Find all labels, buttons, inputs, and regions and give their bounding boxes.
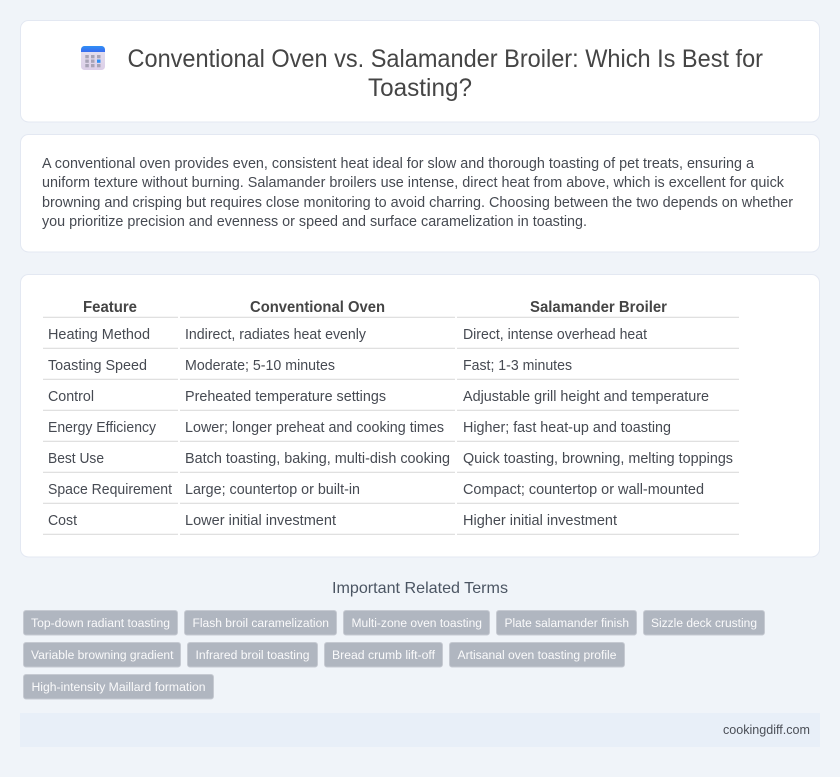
tag (644, 610, 764, 635)
heading: important related terms: Important Related Terms (332, 580, 508, 597)
table row: control: Adjustable grill height and temperature (463, 389, 709, 405)
table header row: Salamander Broiler (530, 299, 667, 316)
panel: introduction text: uniform texture without burning. Salamander broilers use intense, direct heat from above, which is excellent for quick (42, 175, 785, 191)
table row: space requirement: Space Requirement (48, 482, 172, 498)
icon: calendar (81, 46, 105, 70)
table row: cost: Cost (48, 513, 77, 529)
panel: comparison table (20, 274, 820, 557)
table row: best use (48, 451, 733, 467)
tag (324, 642, 442, 667)
table row: space requirement: Compact; countertop or wall-mounted (463, 482, 704, 498)
panel: introduction text (20, 134, 820, 252)
table row: heating method: Heating Method (48, 327, 150, 343)
table row: space requirement (48, 482, 704, 498)
tag: Multi-zone oven toasting (352, 616, 482, 630)
tag (496, 610, 636, 635)
footer (20, 713, 820, 747)
title (128, 45, 763, 102)
tag (184, 610, 336, 635)
title: Toasting? (368, 74, 472, 102)
panel: introduction text: you prioritize precision and evenness or speed and surface caramelization in toasting. (42, 214, 587, 230)
table row: cost (48, 513, 617, 529)
tag: Top-down radiant toasting (31, 616, 170, 630)
table row: energy efficiency: Lower; longer preheat and cooking times (185, 420, 444, 436)
table row: energy efficiency (48, 420, 671, 436)
table row: best use: Batch toasting, baking, multi-dish cooking (185, 451, 450, 467)
tag (344, 610, 490, 635)
panel: title header (20, 20, 820, 122)
tag: Plate salamander finish (504, 616, 629, 630)
table row: heating method (48, 327, 647, 343)
table row: toasting speed: Moderate; 5-10 minutes (185, 358, 335, 374)
tag (24, 642, 180, 667)
panel: introduction text: A conventional oven provides even, consistent heat ideal for slow and thorough toasting of pet treats, ensuring a (42, 156, 755, 172)
table row: energy efficiency: Higher; fast heat-up and toasting (463, 420, 671, 436)
table header row (83, 299, 667, 316)
table row: cost: Higher initial investment (463, 513, 617, 529)
table row: toasting speed (48, 358, 572, 374)
table row: energy efficiency: Energy Efficiency (48, 420, 157, 436)
table row: best use: Quick toasting, browning, melting toppings (463, 451, 733, 467)
table row: heating method: Direct, intense overhead heat (463, 327, 647, 343)
panel: introduction text: browning and crisping but requires close monitoring to avoid charring. Choosing between the two depends on whether (42, 195, 793, 211)
tag: Sizzle deck crusting (651, 616, 757, 630)
table row: best use: Best Use (48, 451, 104, 467)
tag: Variable browning gradient (31, 648, 174, 662)
tag: Artisanal oven toasting profile (458, 648, 617, 662)
table row: control: Preheated temperature settings (185, 389, 386, 405)
table row: toasting speed: Toasting Speed (48, 358, 147, 374)
table row: space requirement: Large; countertop or built-in (185, 482, 360, 498)
tag: Flash broil caramelization (192, 616, 329, 630)
tag (24, 610, 178, 635)
table header row: Conventional Oven (250, 299, 385, 316)
tag list: related terms (24, 610, 764, 699)
table row: control: Control (48, 389, 94, 405)
tag (450, 642, 624, 667)
tag: Bread crumb lift-off (332, 648, 436, 662)
tag (24, 674, 214, 699)
table row: cost: Lower initial investment (185, 513, 336, 529)
table row: control (48, 389, 709, 405)
table header row: Feature (83, 299, 137, 316)
tag: High-intensity Maillard formation (32, 680, 206, 694)
tag (188, 642, 318, 667)
table row: toasting speed: Fast; 1-3 minutes (463, 358, 572, 374)
title: Conventional Oven vs. Salamander Broiler: Which Is Best for (128, 45, 763, 73)
footer: cookingdiff.com (723, 722, 810, 737)
table row: heating method: Indirect, radiates heat evenly (185, 327, 367, 343)
tag: Infrared broil toasting (196, 648, 310, 662)
